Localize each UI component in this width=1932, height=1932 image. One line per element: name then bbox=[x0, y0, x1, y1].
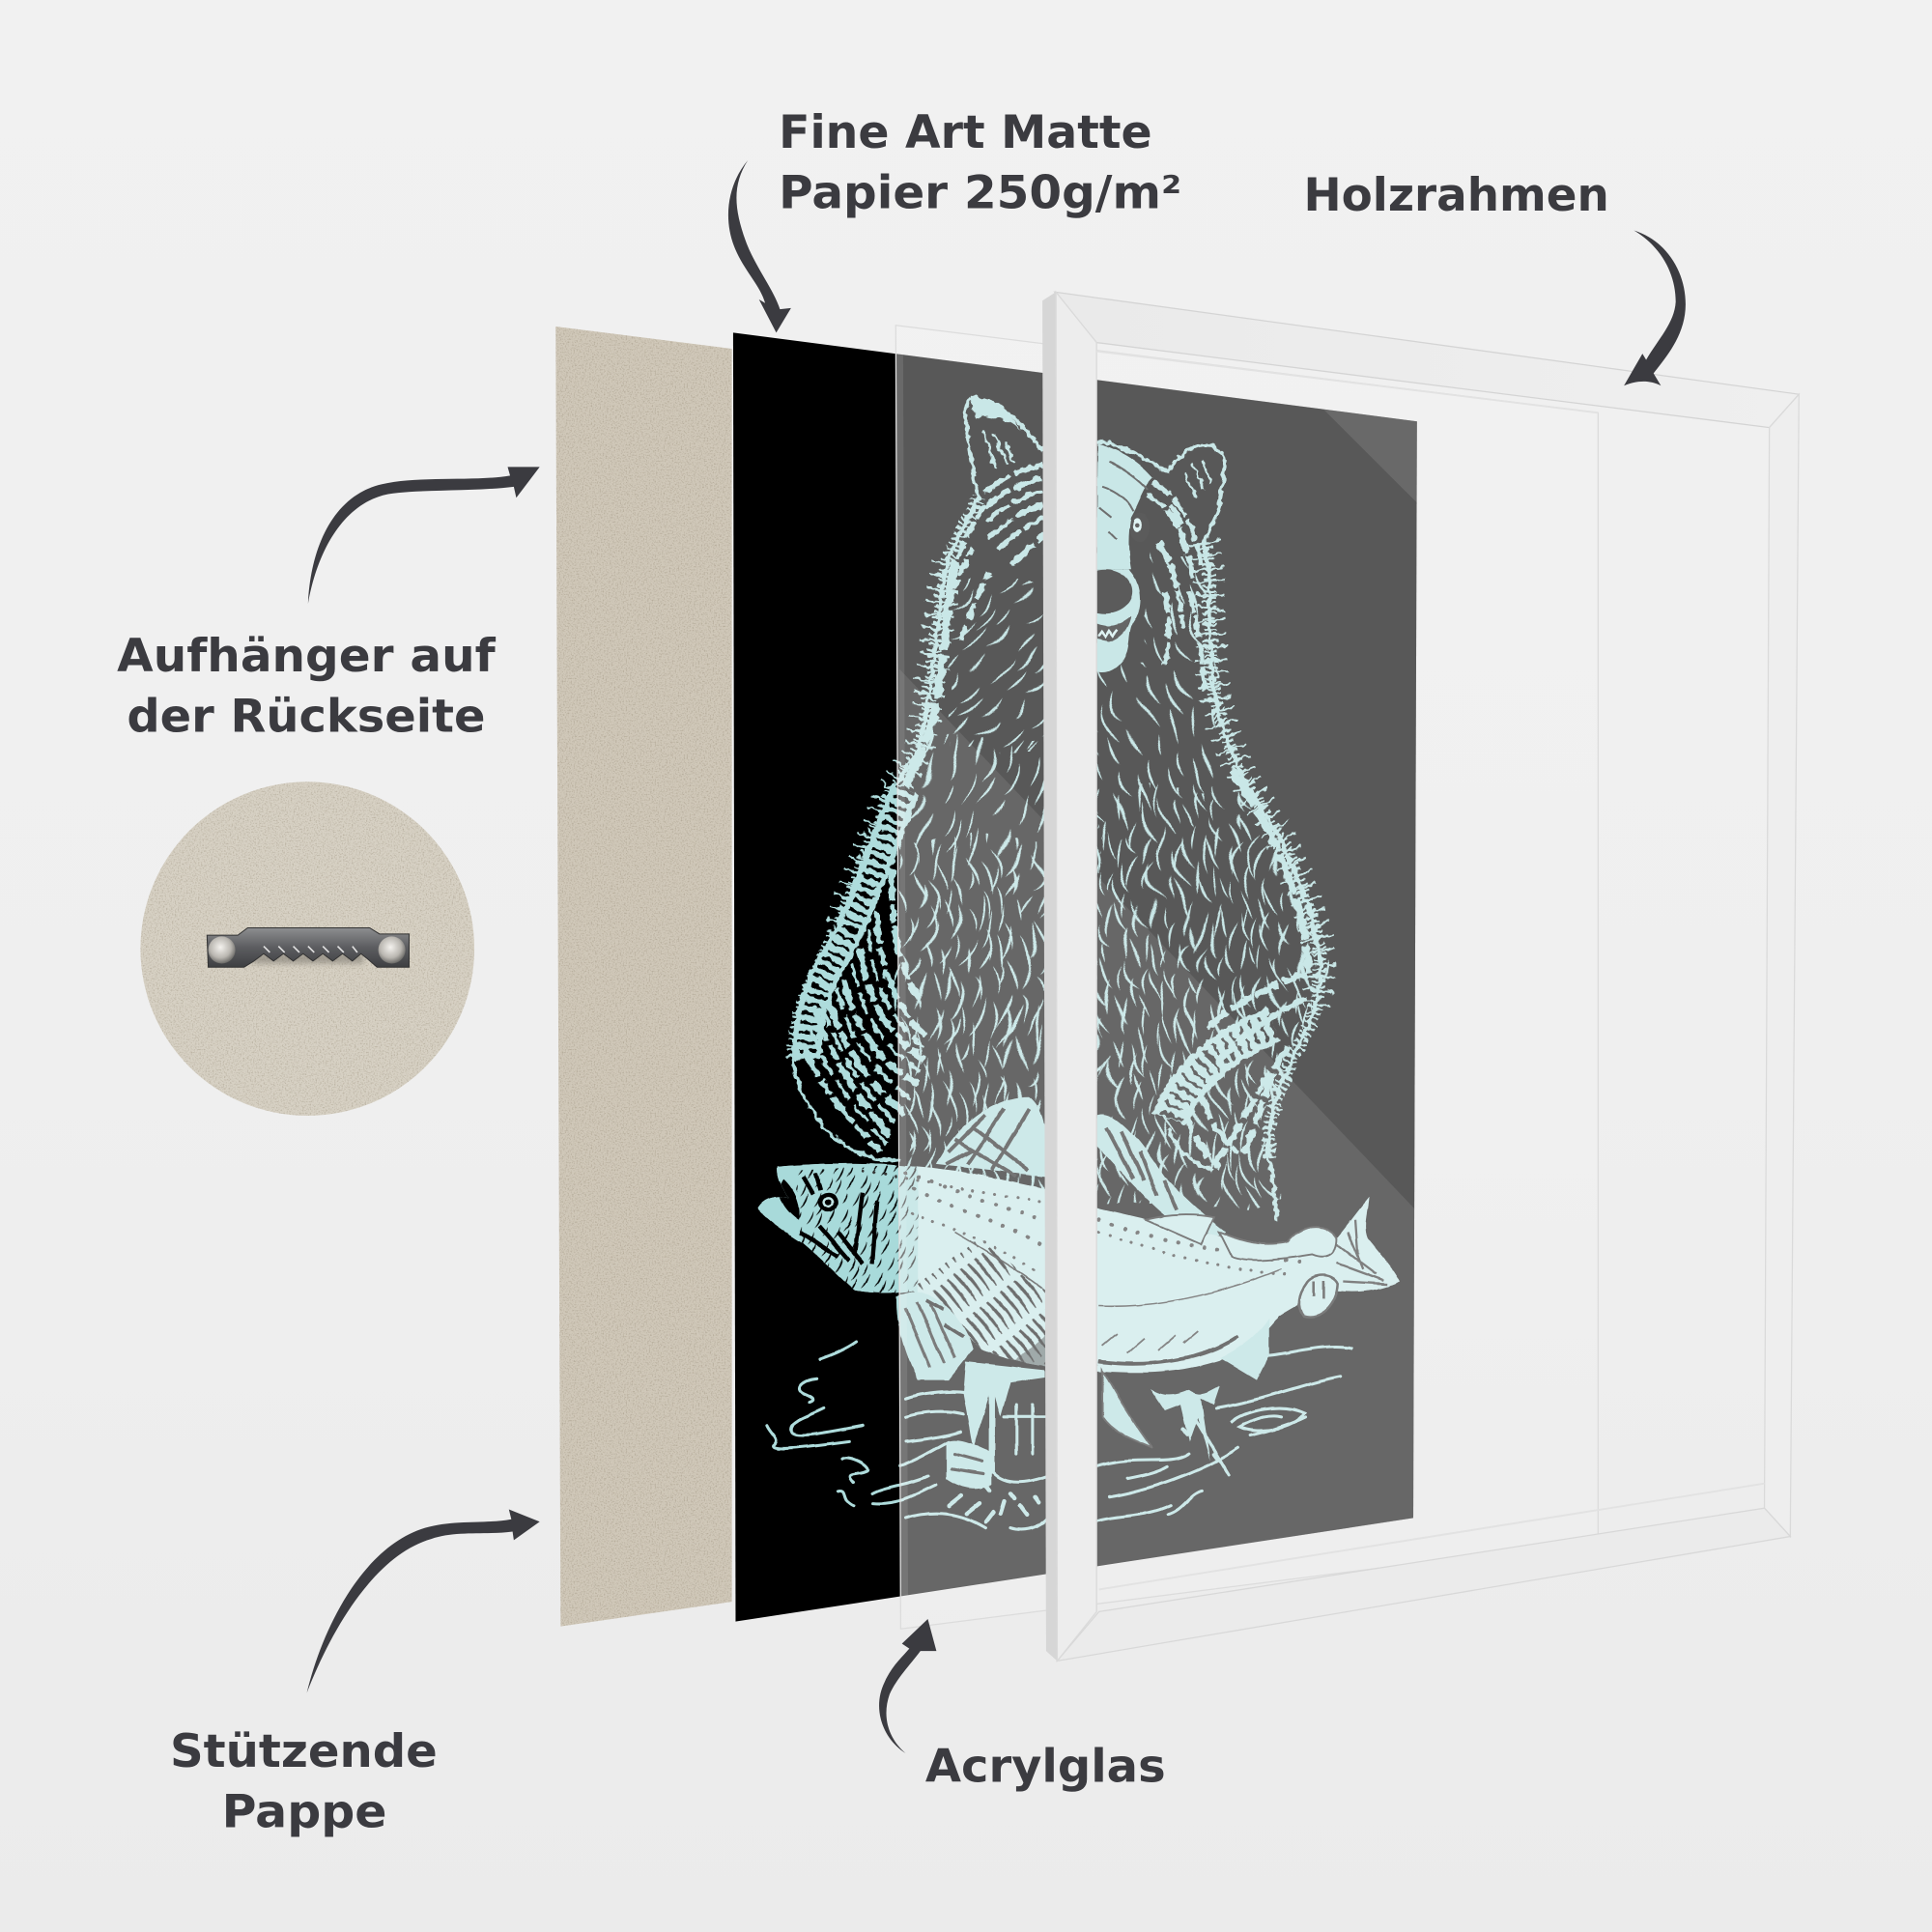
frame top bar bbox=[1055, 292, 1799, 428]
arrow: paper bbox=[728, 160, 791, 332]
panel: wooden frame bbox=[1042, 292, 1799, 1661]
heading: hanger bbox=[117, 630, 496, 744]
illustration: rocks and water ripples bbox=[766, 1342, 1351, 1529]
frame rebate shadow lines bbox=[1096, 352, 1765, 1589]
glass left edge bbox=[895, 354, 908, 1597]
illustration: lower paw, forearm and scales bbox=[936, 1096, 1226, 1236]
frame left bar bbox=[1056, 292, 1096, 1661]
heading: cardboard bbox=[170, 1725, 438, 1839]
bear face bbox=[1078, 443, 1153, 672]
panel: acrylic glass bbox=[895, 326, 1598, 1629]
frame bottom bar bbox=[1057, 1508, 1790, 1661]
heading: paper: Fine Art Matte bbox=[779, 106, 1152, 159]
heading: frame: Holzrahmen bbox=[1303, 169, 1609, 222]
metal sawtooth hanger bbox=[207, 927, 409, 967]
shadow under teeth bbox=[252, 952, 363, 963]
left paw hair fan bbox=[804, 868, 924, 1152]
inset: hanger on the back bbox=[140, 781, 474, 1116]
illustration: salmon bbox=[757, 1163, 1400, 1449]
right paw fur bbox=[1171, 1025, 1274, 1119]
fish fins and bear hands bbox=[1146, 1215, 1213, 1244]
exploded view of the framed print bbox=[117, 113, 1801, 1837]
arrow: cardboard bbox=[307, 1509, 540, 1693]
heading: cardboard: Pappe bbox=[222, 1786, 387, 1839]
ears bbox=[976, 422, 1033, 496]
right rivet bbox=[379, 936, 406, 963]
left forearm hatched band bbox=[807, 788, 906, 1060]
frame side face bbox=[1042, 292, 1057, 1661]
glass reflection lower band bbox=[899, 669, 1417, 1597]
heading: cardboard: Stützende bbox=[170, 1725, 438, 1778]
arrow: acrylic bbox=[879, 1619, 936, 1753]
heading: paper bbox=[779, 106, 1181, 220]
head right stripes bbox=[1146, 483, 1205, 690]
black paper sheet bbox=[733, 332, 1417, 1622]
heading: hanger: Aufhänger auf bbox=[117, 630, 496, 683]
glass reflection corner bbox=[1323, 409, 1417, 502]
illustration: bear outline bbox=[793, 397, 1321, 1221]
cardboard circle bbox=[140, 781, 474, 1116]
illustration: bear fur bbox=[899, 554, 1343, 1208]
left rivet bbox=[209, 936, 236, 963]
arrow: frame bbox=[1624, 231, 1686, 385]
arrow: hanger bbox=[308, 467, 540, 604]
panel: fine art paper with bear print bbox=[733, 332, 1417, 1622]
panel: supporting cardboard bbox=[555, 327, 732, 1627]
head left stripes bbox=[985, 464, 1060, 564]
glass over paper bbox=[895, 354, 1417, 1597]
heading: paper: Papier 250g/m² bbox=[779, 167, 1181, 220]
heading: hanger: der Rückseite bbox=[127, 691, 486, 744]
frame right bar bbox=[1765, 394, 1799, 1537]
fish head markings bbox=[779, 1179, 799, 1220]
glass sheet bbox=[895, 326, 1598, 1629]
heading: acrylic: Acrylglas bbox=[925, 1740, 1166, 1793]
